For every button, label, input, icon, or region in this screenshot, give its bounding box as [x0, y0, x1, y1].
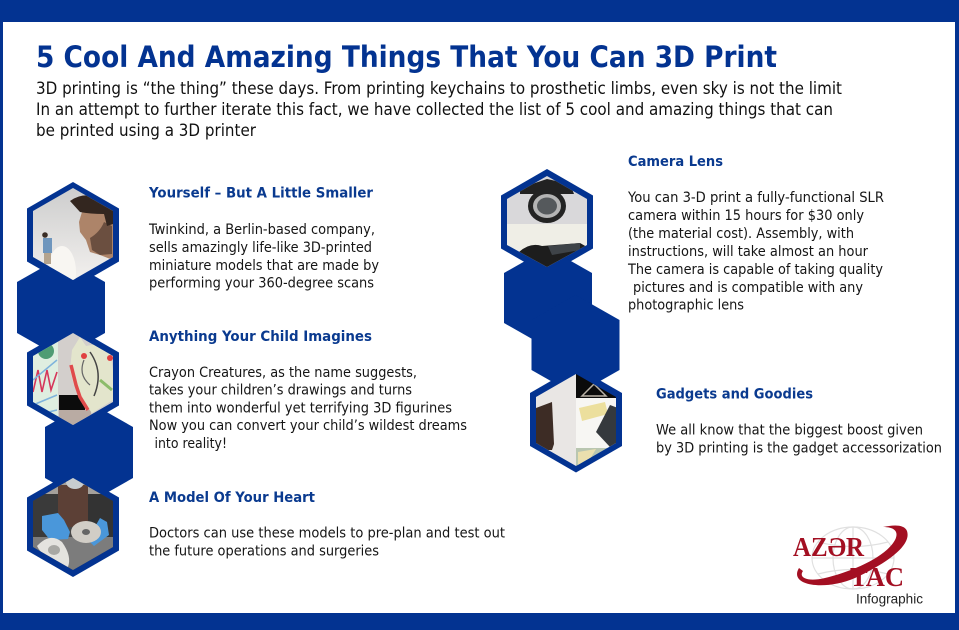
intro text — [36, 79, 842, 141]
text: yourself: sells amazingly life-like 3D-printed — [149, 240, 372, 256]
photo: surgeon with printed heart model — [33, 475, 113, 570]
wordmark: TAC: TAC — [850, 562, 904, 592]
photo: 3D printed camera lens — [507, 176, 587, 268]
logo: AZERTAC — [793, 526, 923, 606]
text: camera lens: photographic lens — [628, 298, 744, 314]
panel: gadgets — [656, 386, 942, 456]
text: camera lens: camera within 15 hours for $30 only — [628, 208, 864, 224]
panel: heart model — [149, 490, 505, 560]
text: yourself: Twinkind, a Berlin-based company, — [148, 222, 375, 238]
text: child imagines: Now you can convert your child’s wildest dreams — [149, 418, 467, 434]
heading: heart model: A Model Of Your Heart — [149, 490, 315, 506]
hexagon frames — [27, 169, 622, 577]
text: child imagines: Crayon Creatures, as the name suggests, — [149, 365, 417, 381]
text: yourself: miniature models that are made by — [149, 258, 379, 274]
text: child imagines — [149, 365, 467, 452]
text: camera lens: pictures and is compatible with any — [633, 280, 863, 296]
wordmark: AZƏR: AZƏR — [793, 532, 864, 562]
photo: man facing miniature of himself — [33, 188, 113, 280]
intro text: be printed using a 3D printer — [36, 121, 256, 141]
text: child imagines: takes your children’s drawings and turns — [149, 382, 412, 398]
heading: child imagines: Anything Your Child Imagines — [149, 329, 372, 345]
text: heart model — [149, 526, 505, 560]
panel: yourself — [148, 186, 379, 292]
intro text: In an attempt to further iterate this fact, we have collected the list of 5 cool and amazing things that can — [36, 100, 833, 120]
photo: gadgets and goodies — [536, 373, 618, 466]
heading: yourself: Yourself – But A Little Smaller — [148, 186, 374, 202]
text: yourself: performing your 360-degree scans — [149, 276, 374, 292]
text: gadgets — [656, 422, 942, 456]
solid hexagon connectors — [17, 248, 620, 503]
panel: child imagines — [149, 329, 467, 452]
icon: globe — [812, 527, 894, 589]
text: camera lens — [627, 190, 884, 314]
text: heart model: the future operations and surgeries — [149, 544, 379, 560]
panel: camera lens — [627, 154, 884, 314]
heading: gadgets: Gadgets and Goodies — [656, 386, 813, 402]
text: child imagines: into reality! — [154, 436, 227, 452]
text: heart model: Doctors can use these models to pre-plan and test out — [149, 526, 505, 542]
text: camera lens: You can 3-D print a fully-functional SLR — [627, 190, 884, 206]
text: yourself — [148, 222, 379, 292]
text: gadgets: We all know that the biggest boost given — [656, 422, 923, 438]
text: camera lens: The camera is capable of taking quality — [627, 262, 883, 278]
intro text: 3D printing is “the thing” these days. From printing keychains to prosthetic limbs, even sky is not the limit — [36, 79, 842, 99]
text: camera lens: (the material cost). Assembly, with — [628, 226, 854, 242]
caption: Infographic: Infographic — [856, 590, 923, 606]
title: 5 Cool And Amazing Things That You Can 3D Print — [36, 40, 777, 74]
icon: swoosh — [797, 526, 908, 585]
text: camera lens: instructions, will take almost an hour — [628, 244, 868, 260]
text: child imagines: them into wonderful yet terrifying 3D figurines — [149, 400, 452, 416]
heading: camera lens: Camera Lens — [628, 154, 723, 170]
photo: child drawing turned into figurine — [33, 333, 113, 426]
